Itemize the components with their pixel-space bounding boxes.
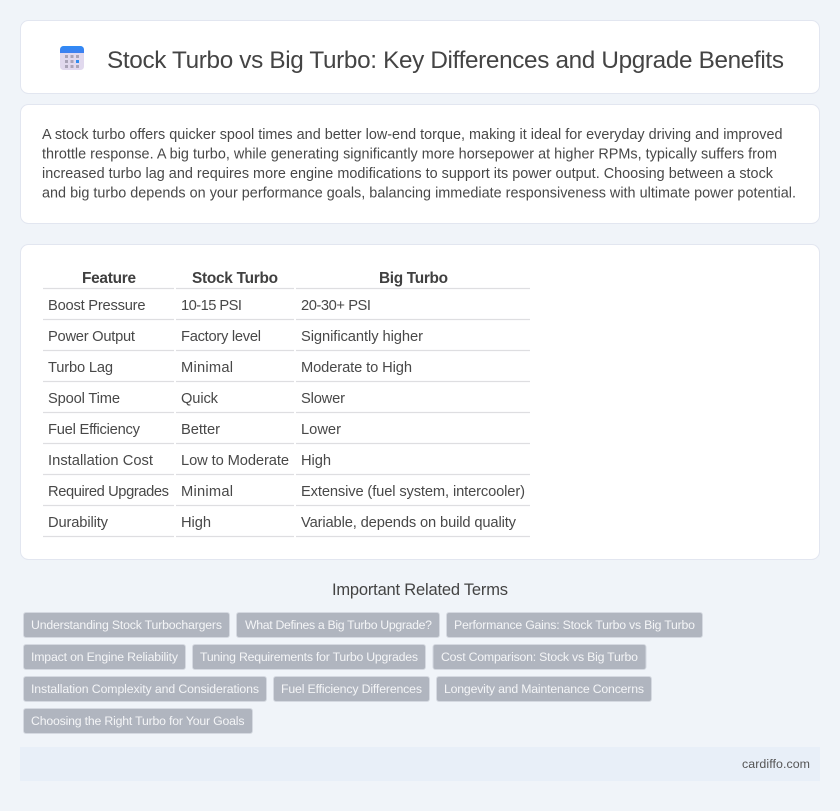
- row: durability: Durability: [48, 515, 109, 531]
- tag: Longevity and Maintenance Concerns: [444, 682, 644, 696]
- tag: Performance Gains: Stock Turbo vs Big Turbo: [454, 618, 695, 632]
- tag: [236, 612, 440, 638]
- row: installation cost: Low to Moderate: [181, 453, 289, 469]
- row: boost pressure: 10-15 PSI: [181, 298, 242, 314]
- panel: introduction: [20, 104, 820, 224]
- table header: Feature: [82, 270, 136, 287]
- row: turbo lag: Moderate to High: [301, 360, 412, 376]
- tag: [24, 708, 252, 734]
- intro paragraph: [42, 127, 796, 202]
- tag: Installation Complexity and Considerations: [31, 682, 259, 696]
- tag: Impact on Engine Reliability: [31, 650, 179, 664]
- row: fuel efficiency: Better: [181, 422, 220, 438]
- tag: [446, 612, 702, 638]
- row: spool time: Spool Time: [48, 391, 120, 407]
- row: required upgrades: Required Upgrades: [48, 484, 169, 500]
- footer: [20, 747, 820, 781]
- footer: cardiffo.com: [742, 757, 810, 771]
- tag: Cost Comparison: Stock vs Big Turbo: [441, 650, 638, 664]
- row: spool time: Quick: [181, 391, 219, 407]
- tag: [24, 612, 230, 638]
- tag: [433, 644, 646, 670]
- row: power output: Power Output: [48, 329, 135, 345]
- row: required upgrades: Extensive (fuel system, intercooler): [301, 484, 525, 500]
- tag: Tuning Requirements for Turbo Upgrades: [200, 650, 418, 664]
- row: durability: Variable, depends on build quality: [301, 515, 517, 531]
- row: required upgrades: Minimal: [181, 484, 233, 500]
- tag: [24, 644, 186, 670]
- row: fuel efficiency: [48, 422, 341, 438]
- row: fuel efficiency: Lower: [301, 422, 341, 438]
- row: required upgrades: [48, 484, 525, 500]
- tag: Fuel Efficiency Differences: [281, 682, 422, 696]
- row: power output: Significantly higher: [301, 329, 423, 345]
- panel: header: [20, 20, 820, 94]
- row: installation cost: Installation Cost: [48, 453, 153, 469]
- intro paragraph: and big turbo depends on your performance goals, balancing immediate responsiveness with ultimate power potential.: [42, 186, 796, 202]
- row: boost pressure: [48, 298, 371, 314]
- tag: [192, 644, 426, 670]
- table grid lines: [43, 288, 530, 536]
- tag: What Defines a Big Turbo Upgrade?: [245, 618, 432, 632]
- row: turbo lag: [48, 360, 412, 376]
- row: power output: [48, 329, 423, 345]
- row: durability: High: [181, 515, 211, 531]
- intro paragraph: throttle response. A big turbo, while generating significantly more horsepower at higher RPMs, typically suffers from: [42, 146, 777, 162]
- tag: [24, 676, 266, 702]
- intro paragraph: increased turbo lag and requires more engine modifications to support its power output. Choosing between a stock: [42, 166, 774, 182]
- row: power output: Factory level: [181, 329, 261, 345]
- row: fuel efficiency: Fuel Efficiency: [48, 422, 141, 438]
- row: spool time: Slower: [301, 391, 345, 407]
- row: installation cost: High: [301, 453, 331, 469]
- table header: [82, 270, 448, 287]
- row: installation cost: [48, 453, 331, 469]
- tag: [436, 676, 652, 702]
- row: boost pressure: 20-30+ PSI: [301, 298, 371, 314]
- table header: Stock Turbo: [192, 270, 278, 287]
- row: boost pressure: Boost Pressure: [48, 298, 146, 314]
- panel: comparison table: [20, 244, 820, 560]
- row: durability: [48, 515, 517, 531]
- title: Stock Turbo vs Big Turbo: Key Differences and Upgrade Benefits: [107, 47, 784, 74]
- row: turbo lag: Turbo Lag: [48, 360, 113, 376]
- row: turbo lag: Minimal: [181, 360, 233, 376]
- tag: Understanding Stock Turbochargers: [31, 618, 222, 632]
- related term tags: [24, 612, 702, 734]
- icon: calendar: [60, 46, 84, 70]
- intro paragraph: A stock turbo offers quicker spool times and better low-end torque, making it ideal for everyday driving and improved: [42, 127, 782, 143]
- heading: important related terms: Important Related Terms: [332, 581, 508, 599]
- tag: Choosing the Right Turbo for Your Goals: [31, 714, 244, 728]
- tag: [274, 676, 430, 702]
- row: spool time: [48, 391, 345, 407]
- table header: Big Turbo: [379, 270, 448, 287]
